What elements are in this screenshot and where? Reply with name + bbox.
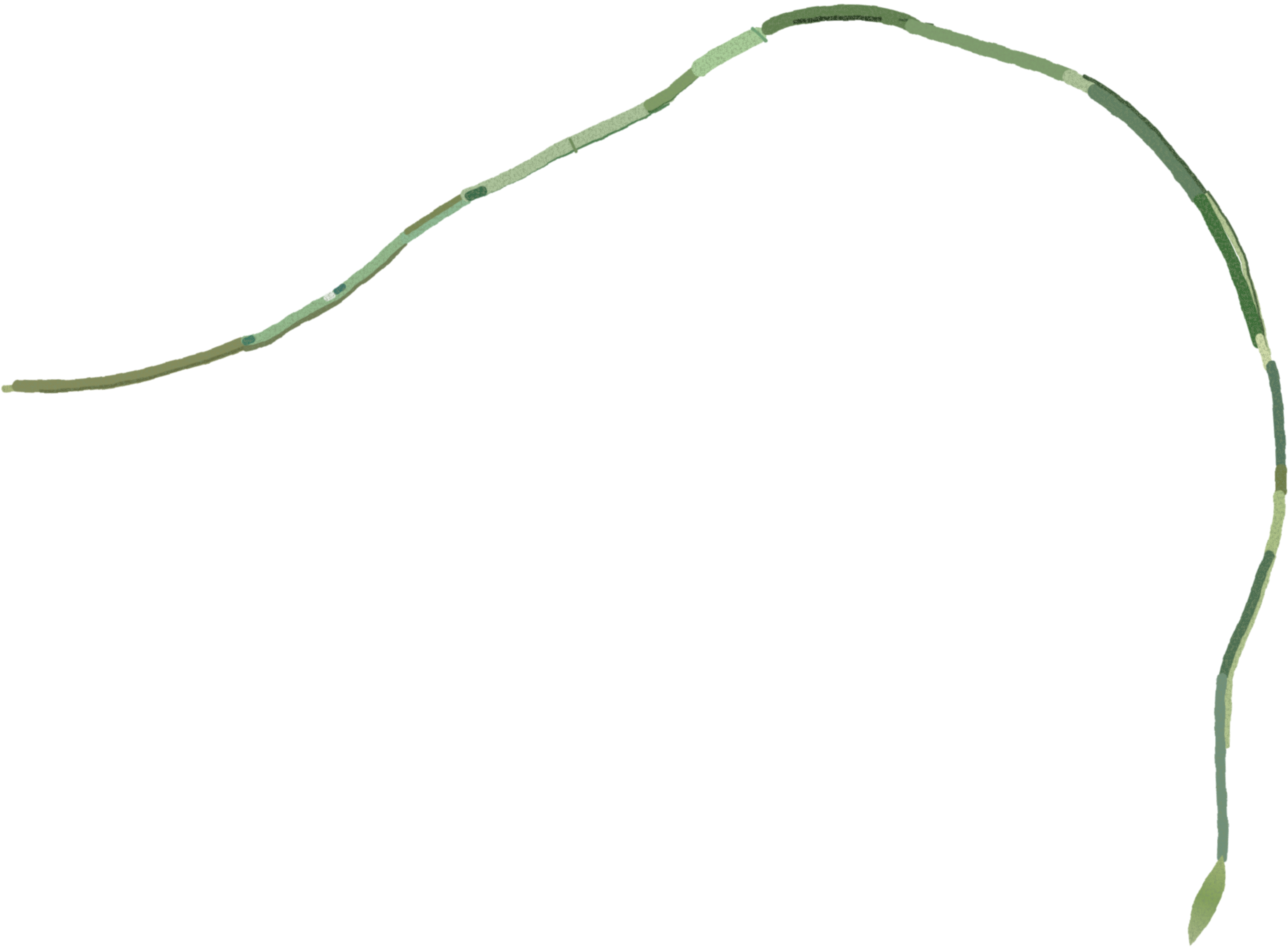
stem: light green lower section <box>246 237 404 348</box>
stem: pale green middle section <box>467 96 668 200</box>
stem: olive node <box>1275 470 1287 490</box>
stem: upper green section <box>650 28 766 111</box>
stem: blue-green vertical section <box>1271 366 1281 466</box>
stem: pale green lower strip <box>1226 495 1280 745</box>
leaf tip <box>1189 855 1225 946</box>
stem: dark lower section <box>1224 555 1269 675</box>
stem: dark grey-green arc section <box>1085 76 1205 196</box>
stem: grey-green bottom section <box>1220 678 1223 858</box>
stem: olive joint section <box>406 194 466 238</box>
stem: mid green descending section <box>912 26 1090 87</box>
stem: dark crest section <box>768 12 933 28</box>
stem: deep green arc section <box>1201 192 1270 366</box>
stem: olive base section <box>5 344 243 391</box>
